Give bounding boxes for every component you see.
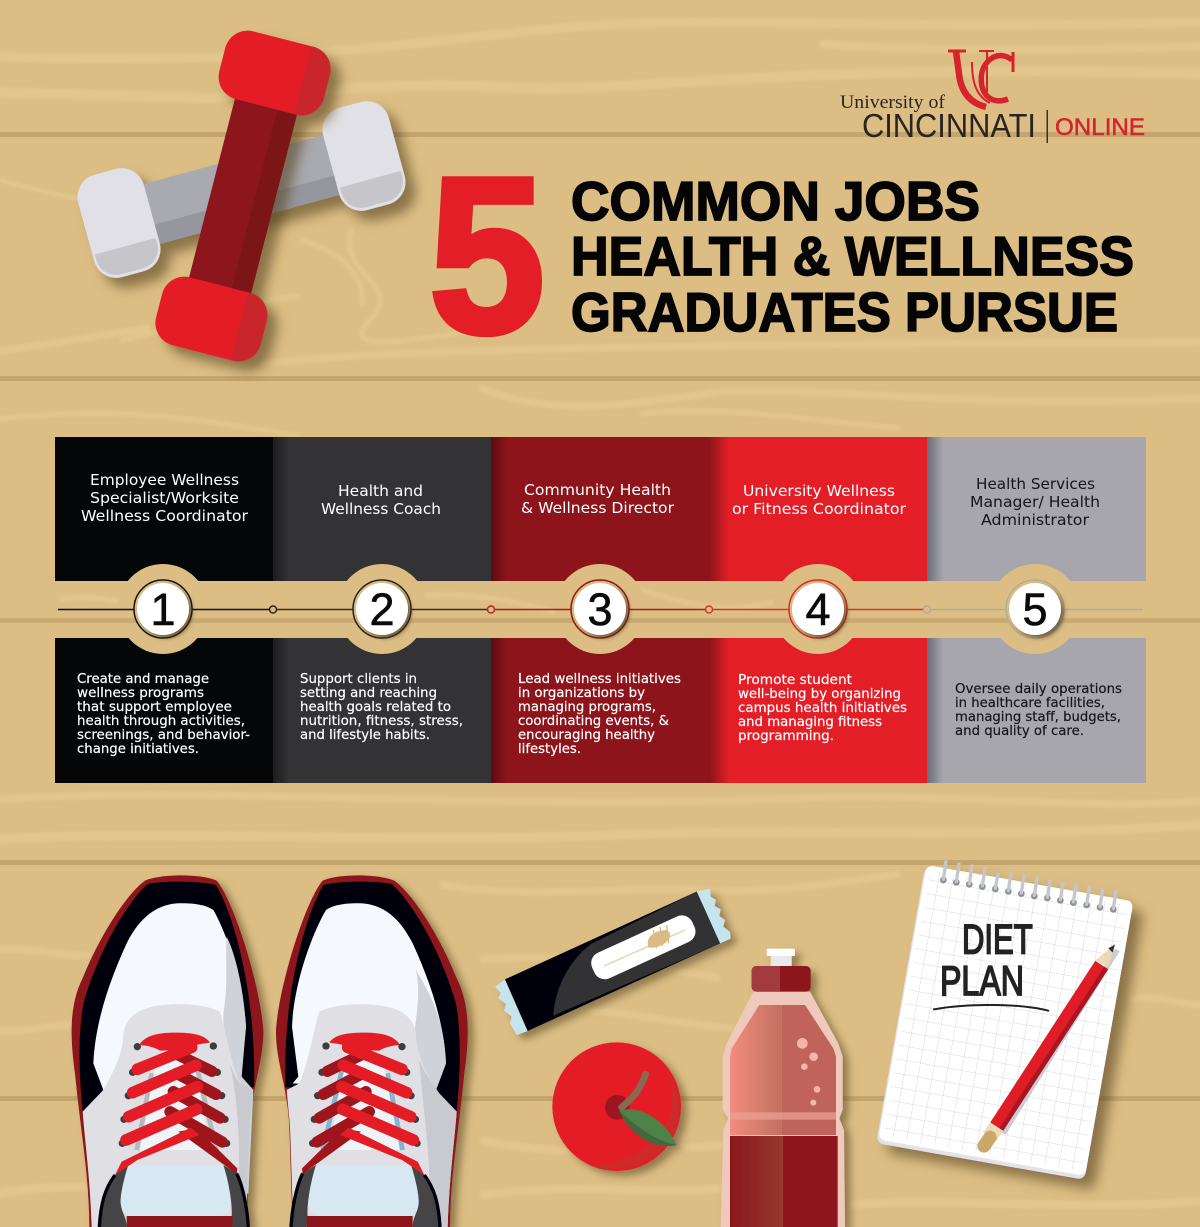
description: job 1: that support employee (77, 699, 232, 715)
notebook spiral binding (940, 862, 1117, 913)
title (571, 170, 1134, 343)
description: job 1: change initiatives. (77, 741, 199, 757)
icon: apple (552, 1042, 681, 1171)
badge 4 (789, 580, 847, 638)
description: job 2: setting and reaching (300, 685, 437, 701)
heading: job 5 (970, 475, 1100, 529)
logo: University of Cincinnati Online (840, 51, 1145, 144)
badge 1 (134, 580, 192, 638)
badge 3 (571, 580, 629, 638)
description: job 3: managing programs, (518, 699, 656, 715)
title: HEALTH & WELLNESS (571, 225, 1134, 287)
icon: pencil (984, 944, 1117, 1146)
title: COMMON JOBS (571, 170, 980, 232)
description: job 5: in healthcare facilities, (955, 695, 1105, 711)
heading: job 2 (321, 482, 441, 518)
heading: job 2: Wellness Coach (321, 500, 441, 518)
badge 3: 3 (587, 584, 613, 635)
icon: left sneaker (72, 875, 263, 1227)
heading: job 3: Community Health (524, 481, 671, 499)
description: job 3 (518, 671, 681, 757)
icon: diet plan notebook (876, 862, 1133, 1180)
centre plank seam (0, 618, 1200, 623)
heading: job 2: Health and (338, 482, 423, 500)
description: job 1: screenings, and behavior- (77, 727, 250, 743)
icon: UC monogram (948, 51, 1013, 107)
icon: red dumbbell (150, 26, 336, 366)
description: job 1: health through activities, (77, 713, 245, 729)
description: job 3: encouraging healthy (518, 727, 655, 743)
text: ONLINE: ONLINE (1055, 114, 1145, 141)
description: job 5 (955, 681, 1122, 739)
timeline connector (58, 606, 1143, 613)
handwritten text: PLAN: PLAN (940, 958, 1024, 1004)
heading: job 1: Employee Wellness (90, 471, 239, 489)
icon: right sneaker (276, 875, 468, 1227)
panel: job colour columns (55, 437, 1146, 783)
heading: job 3: & Wellness Director (521, 499, 675, 517)
title: GRADUATES PURSUE (571, 281, 1118, 343)
description: job 5: and quality of care. (955, 723, 1084, 739)
description: job 2: Support clients in (300, 671, 417, 687)
heading: job 5: Administrator (981, 511, 1090, 529)
description: job 5: Oversee daily operations (955, 681, 1122, 697)
underline (934, 1005, 1048, 1011)
heading: job 1: Wellness Coordinator (81, 507, 249, 525)
heading: job 5: Health Services (976, 475, 1095, 493)
badge 4: 4 (805, 584, 831, 635)
description: job 2 (300, 671, 463, 743)
heading: job 1: Specialist/Worksite (90, 489, 239, 507)
description: job 1: Create and manage (77, 671, 209, 687)
description: job 4 (738, 672, 907, 744)
badge 2: 2 (369, 584, 395, 635)
heading: job 4: or Fitness Coordinator (732, 500, 907, 518)
description: job 2: health goals related to (300, 699, 451, 715)
description: job 4: Promote student (738, 672, 852, 688)
description: job 4: programming. (738, 728, 834, 744)
divider bar (1046, 110, 1048, 143)
text: University of: University of (840, 92, 946, 113)
description: job 5: managing staff, budgets, (955, 709, 1121, 725)
description: job 1: wellness programs (77, 685, 204, 701)
description: job 3: lifestyles. (518, 741, 581, 757)
number badge backgrounds (118, 564, 1080, 654)
heading: job 3 (521, 481, 675, 517)
description: job 1 (77, 671, 250, 757)
icon: water bottle (721, 949, 845, 1227)
big number 5: 5 (429, 132, 545, 380)
heading: job 5: Manager/ Health (970, 493, 1100, 511)
description: job 2: nutrition, fitness, stress, (300, 713, 463, 729)
description: job 4: and managing fitness (738, 714, 882, 730)
description: job 2: and lifestyle habits. (300, 727, 430, 743)
badge 5 (1006, 580, 1064, 638)
icon: grey dumbbell (72, 96, 411, 283)
heading: job 4 (732, 482, 907, 518)
badge 2 (353, 580, 411, 638)
text: CINCINNATI: CINCINNATI (862, 107, 1036, 144)
wood plank seams (0, 132, 1200, 1101)
description: job 3: in organizations by (518, 685, 645, 701)
description: job 3: Lead wellness initiatives (518, 671, 681, 687)
description: job 4: campus health initiatives (738, 700, 907, 716)
description: job 3: coordinating events, & (518, 713, 669, 729)
description: job 4: well-being by organizing (738, 686, 901, 702)
icon: snack bar (495, 889, 731, 1035)
handwritten text: DIET: DIET (962, 917, 1033, 963)
heading: job 1 (81, 471, 249, 525)
heading: job 4: University Wellness (743, 482, 895, 500)
icon: crossed dumbbells (72, 26, 411, 366)
badge 5: 5 (1022, 584, 1048, 635)
badge 1: 1 (150, 584, 176, 635)
